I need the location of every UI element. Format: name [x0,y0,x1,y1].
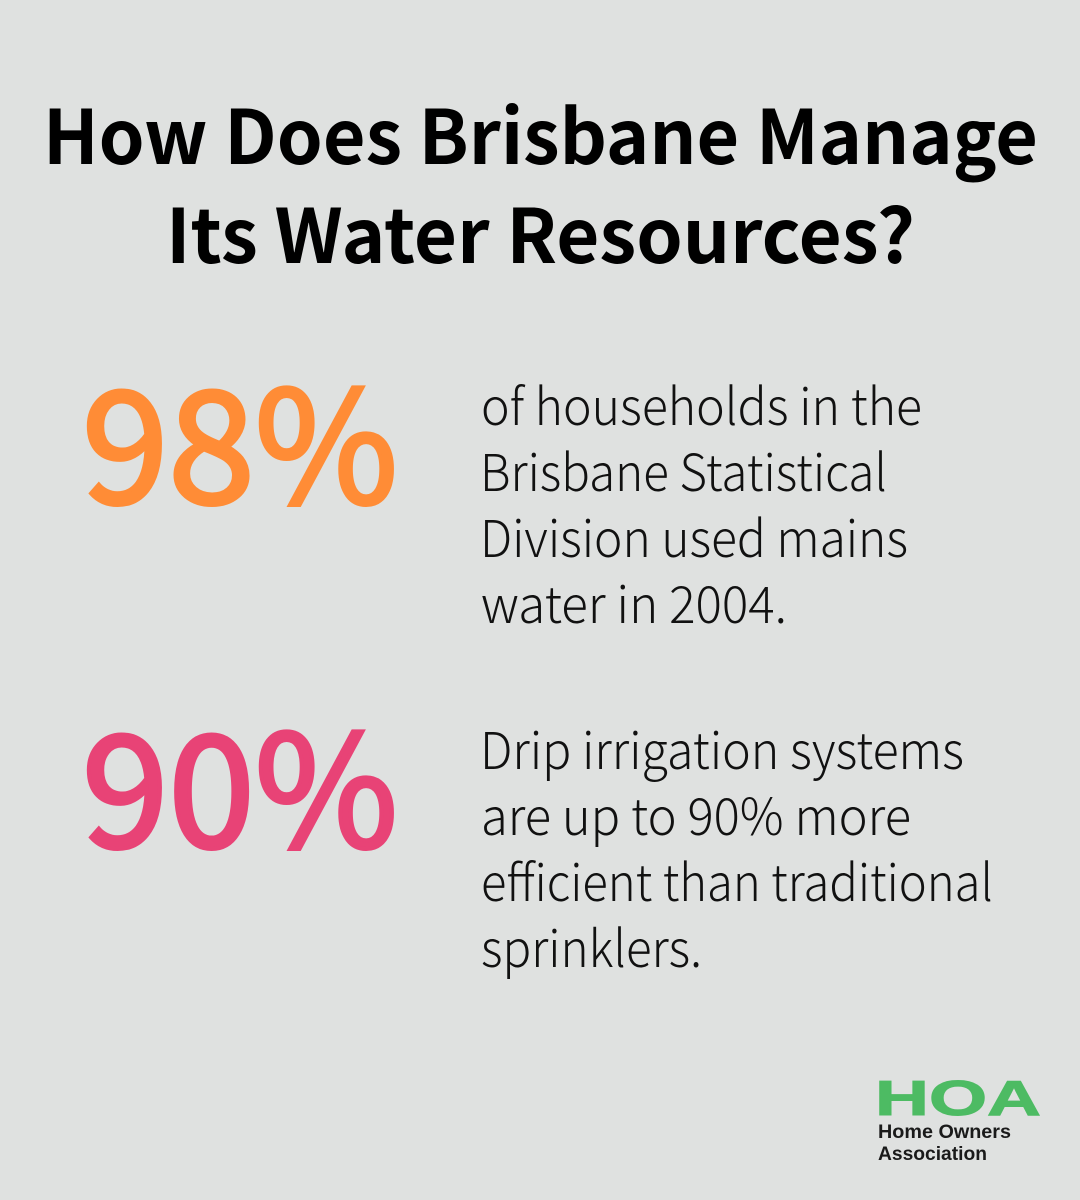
text block: mains water [480,366,922,638]
title: Its Water Resources? [166,176,915,285]
text block: mains water: Brisbane Statistical [480,432,887,506]
text block: drip irrigation: are up to 90% more [481,776,911,850]
logo: Home Owners Association: Association [878,1144,987,1165]
stat: 98%: 98% [82,323,398,548]
logo: Home Owners Association: HOA [875,1072,1041,1126]
title [43,77,1038,285]
title: How Does Brisbane Manage [43,77,1038,186]
text block: mains water: water in 2004. [481,564,787,638]
text block: mains water: Division used mains [480,498,908,572]
text block: drip irrigation: sprinklers. [481,908,702,982]
stat: 90%: 90% [82,667,398,892]
logo: Home Owners Association [875,1072,1041,1165]
text block: drip irrigation: efficient than traditional [481,842,993,916]
text block: drip irrigation [480,710,993,982]
text block: mains water: of households in the [481,366,922,440]
logo: Home Owners Association: Home Owners [878,1122,1011,1143]
text block: drip irrigation: Drip irrigation systems [480,710,964,784]
